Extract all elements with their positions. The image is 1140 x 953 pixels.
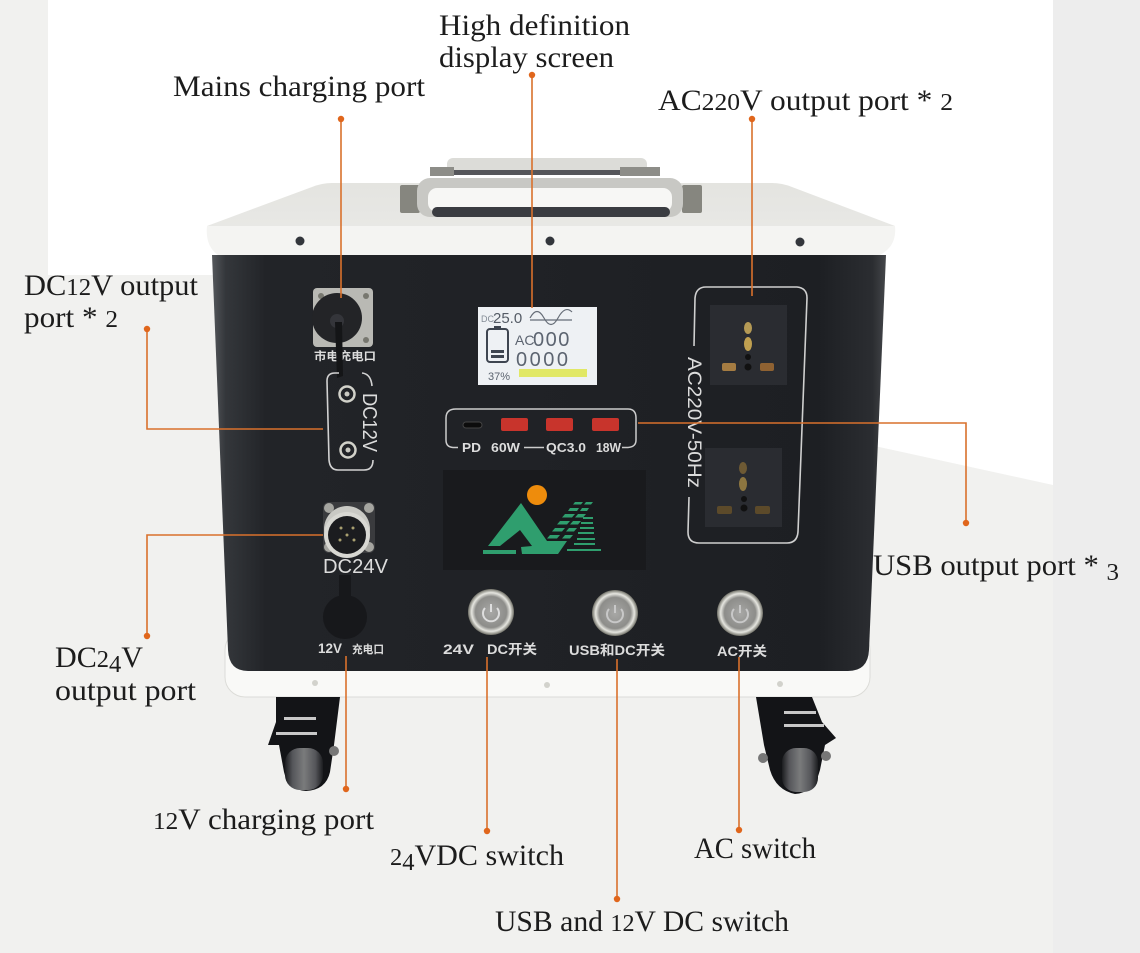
USB panel: 18W	[596, 440, 622, 455]
callout: 12V charging port: 12V charging port	[153, 804, 375, 836]
callout: 24VDC switch: 2	[390, 845, 402, 871]
callout: DC24V output port: 4	[109, 652, 121, 678]
callout: AC switch: AC switch	[694, 833, 816, 865]
callout: USB and 12V DC switch	[495, 659, 789, 938]
switch 24V DC: DC开关	[487, 641, 538, 657]
callout: AC220V output port: AC220V output port * 2	[658, 85, 953, 117]
display screen: DC	[481, 314, 494, 324]
display screen: 0000	[516, 349, 570, 371]
switch USB and DC	[569, 590, 666, 658]
USB panel	[446, 409, 636, 455]
AC220V panel: AC220V-50Hz	[683, 357, 704, 488]
callout: AC220V output port	[658, 85, 953, 296]
bottom rail	[225, 630, 870, 697]
mains port	[312, 288, 376, 378]
callout: DC12V output port: port * 2	[24, 302, 118, 334]
callout: DC24V output port	[55, 535, 323, 707]
callout: DC12V output port: DC12V output	[24, 270, 199, 302]
display screen: 37%	[488, 371, 510, 383]
callout: Mains charging port: Mains charging port	[173, 71, 426, 103]
12V charging port	[318, 575, 384, 656]
rail screws	[312, 680, 783, 688]
USB panel: QC3.0	[546, 440, 586, 455]
callout: USB output port: USB output port *	[873, 550, 1090, 582]
display screen: 000	[533, 329, 571, 351]
DC12V bracket: DC12V	[358, 393, 380, 453]
callout: High definition display screen	[439, 10, 630, 308]
power station unit	[207, 158, 895, 794]
logo	[443, 470, 646, 570]
right caster	[756, 697, 836, 794]
callout: AC switch	[694, 657, 816, 865]
callout: 24VDC switch	[390, 657, 564, 876]
top lid	[207, 183, 895, 226]
USB-C port	[463, 422, 482, 428]
display screen: AC	[515, 332, 534, 348]
left caster	[268, 697, 340, 791]
switch 24V DC: 24V	[443, 641, 475, 657]
DC12V bracket	[327, 373, 380, 470]
callout: DC24V output port: V	[121, 642, 143, 674]
display screen: 25.0	[493, 310, 522, 327]
DC24V port: DC24V	[323, 556, 389, 578]
callout: High definition display screen: display screen	[439, 42, 614, 74]
AC220V panel	[683, 287, 807, 543]
DC24V port	[323, 502, 389, 578]
callout: USB output port: 3	[1107, 560, 1119, 586]
callout: High definition display screen: High definition	[439, 10, 630, 42]
callout: 24VDC switch: VDC switch	[414, 840, 564, 872]
socket bottom	[705, 448, 782, 527]
switch AC	[717, 590, 768, 659]
display screen	[478, 307, 597, 385]
mains port: 市电充电口	[314, 349, 376, 363]
callout: Mains charging port	[173, 71, 426, 298]
handle	[400, 158, 702, 217]
callout: USB and 12V DC switch: USB and 12V DC switch	[495, 906, 789, 938]
12V charging port: 充电口	[352, 642, 384, 656]
callout: 12V charging port	[153, 656, 375, 836]
black body	[212, 255, 886, 671]
USB panel: 60W	[491, 440, 521, 455]
callout: DC12V output port	[24, 270, 323, 429]
callout: DC24V output port: DC2	[55, 642, 109, 674]
switch 24V DC	[443, 589, 538, 657]
callout: DC24V output port: output port	[55, 675, 197, 707]
12V charging port: 12V	[318, 640, 343, 656]
socket top	[710, 305, 787, 385]
switch USB and DC: USB和DC开关	[569, 642, 666, 658]
switch AC: AC开关	[717, 643, 768, 659]
callout: USB output port	[638, 423, 1119, 586]
callout: 24VDC switch: 4	[402, 850, 414, 876]
USB panel: PD	[462, 440, 481, 455]
